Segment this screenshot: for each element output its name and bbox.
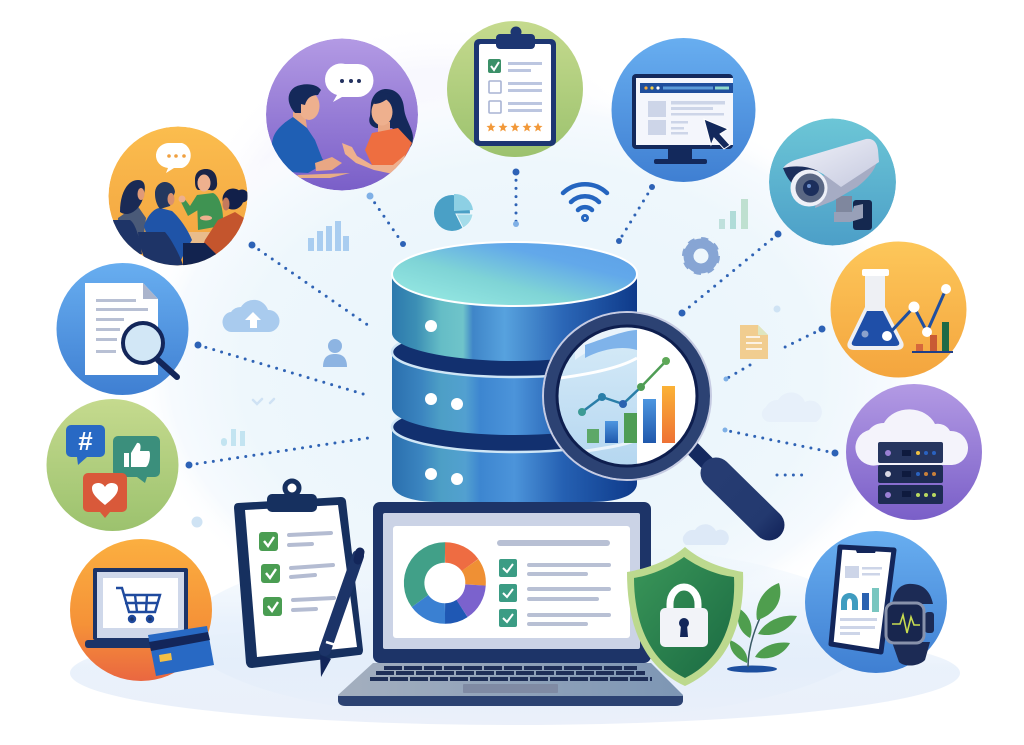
- screen: [393, 526, 630, 638]
- magnifying glass: [543, 312, 769, 525]
- icon: faint chart: [221, 429, 245, 446]
- icon: bar chart faint: [308, 221, 349, 251]
- clipboard paper: [479, 44, 551, 141]
- thumbs up bubble: [113, 436, 160, 483]
- person left: [118, 180, 146, 250]
- speech bubble: [156, 143, 191, 173]
- trackpad: [463, 684, 558, 693]
- document: [85, 283, 158, 375]
- camera lower housing: [815, 160, 877, 208]
- keyboard: [370, 668, 652, 679]
- icon: signal bars: [719, 199, 748, 229]
- camera lens: [790, 170, 828, 206]
- page content: [648, 101, 725, 135]
- panel: security camera: [769, 118, 896, 246]
- speech bubble: [325, 63, 373, 102]
- man: [272, 84, 342, 173]
- base edge: [338, 696, 683, 706]
- board: [234, 497, 363, 668]
- padlock: [660, 587, 708, 647]
- bezel: [383, 513, 640, 649]
- star rating: [486, 122, 542, 132]
- lens chart bars: [587, 386, 675, 443]
- chart line: [882, 284, 951, 341]
- panel: interview: [266, 38, 418, 190]
- hood shade: [783, 166, 818, 185]
- icon: faint cloud lower: [683, 524, 729, 545]
- background lavender haze: [180, 20, 700, 520]
- lens rim: [543, 312, 711, 480]
- person standing green: [178, 169, 223, 230]
- camera mount: [834, 196, 872, 230]
- clipboard with checklist: [234, 481, 363, 668]
- donut chart: [414, 552, 476, 614]
- panel: social media: [46, 399, 178, 531]
- icon: wifi: [563, 184, 607, 220]
- table: [188, 232, 210, 243]
- panel: e-commerce: [70, 539, 214, 681]
- text lines: [289, 533, 334, 610]
- background wash: [130, 85, 930, 655]
- chart bars: [912, 322, 953, 353]
- icon: cloud upload: [222, 300, 280, 332]
- security shield: [627, 547, 743, 686]
- panel: mobile and wearable: [805, 531, 947, 673]
- disc 2: [392, 327, 637, 435]
- panel: survey clipboard: [447, 21, 583, 157]
- pen: [320, 552, 360, 677]
- status lights: [425, 320, 463, 485]
- disc 3: [392, 402, 637, 502]
- clip: [267, 481, 317, 512]
- icon: gear: [685, 240, 717, 272]
- laptop: [338, 502, 683, 706]
- laptop: [85, 568, 188, 648]
- cursor: [704, 119, 730, 149]
- plant: [727, 583, 797, 672]
- lower shadow: [183, 243, 216, 266]
- dotted connectors: [186, 168, 838, 475]
- screen checklist: [499, 559, 611, 627]
- hashtag bubble: #: [78, 426, 93, 456]
- faint dots: [192, 306, 780, 528]
- panel: cloud server: [846, 384, 982, 520]
- panel: lab flask: [830, 242, 966, 378]
- lens chart line: [578, 357, 670, 416]
- woman: [342, 89, 413, 174]
- icon: person: [323, 339, 347, 367]
- shopping cart: [116, 588, 160, 622]
- browser bar: [640, 83, 733, 93]
- clip: [496, 26, 535, 49]
- monitor: [632, 74, 733, 164]
- handle: [690, 446, 769, 525]
- screen title line: [497, 540, 610, 546]
- database cylinder: [392, 242, 637, 502]
- icon: document faint: [740, 325, 768, 359]
- icon: faint tick marks: [253, 399, 274, 404]
- small background icons: [192, 184, 822, 545]
- chair front: [138, 232, 183, 268]
- panel: web browser: [612, 38, 756, 182]
- panel: team meeting: [108, 126, 250, 270]
- magnifier: [123, 323, 177, 377]
- icon: faint cloud right: [762, 392, 822, 422]
- heart bubble: [83, 473, 127, 518]
- panel: document search: [56, 263, 188, 395]
- server stack: [878, 442, 943, 504]
- chair left: [113, 220, 142, 256]
- phone: [831, 547, 894, 652]
- paper: [245, 505, 357, 657]
- floor shadow: [70, 621, 960, 725]
- smartwatch: [886, 584, 934, 666]
- lid: [373, 502, 651, 663]
- checks: [259, 532, 282, 616]
- lens: [558, 328, 696, 464]
- person right rust: [204, 188, 248, 255]
- table: [297, 173, 350, 178]
- credit card: [148, 626, 214, 676]
- flask: [847, 269, 904, 350]
- icon: pie chart: [434, 194, 473, 231]
- camera hood: [783, 139, 879, 187]
- cloud: [855, 409, 968, 466]
- laptop base: [338, 663, 683, 706]
- clipboard: [474, 39, 556, 146]
- disc 1: [392, 242, 637, 361]
- checklist items: [488, 59, 542, 113]
- raised floor mound: [185, 542, 875, 722]
- person centre blue: [144, 182, 192, 262]
